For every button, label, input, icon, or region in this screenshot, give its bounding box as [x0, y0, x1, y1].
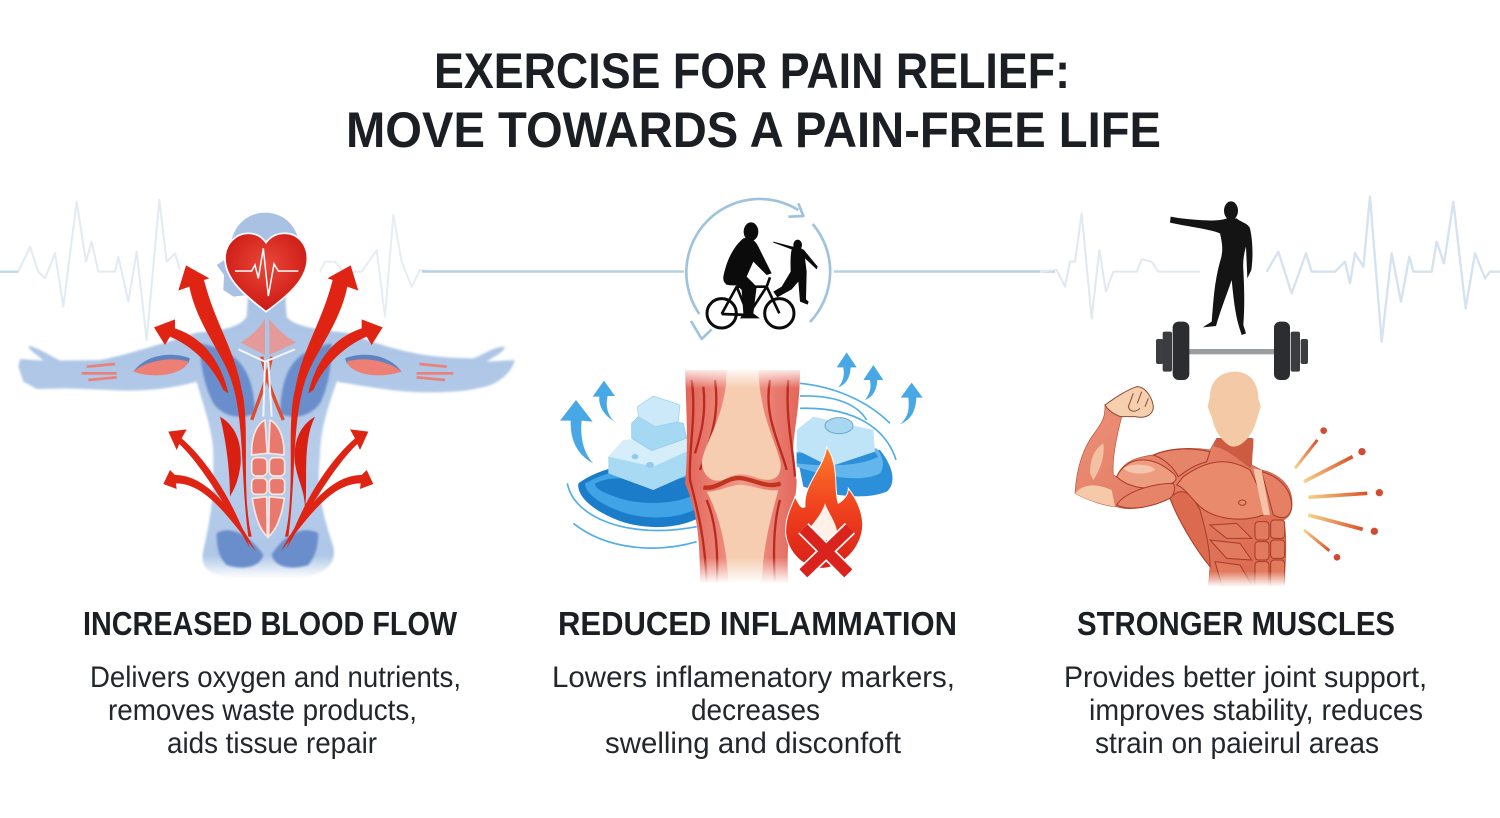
abdominal blocks: [1210, 520, 1285, 587]
body silhouette: [18, 290, 515, 578]
title: MOVE TOWARDS A PAIN-FREE LIFE: [346, 102, 1161, 158]
heartbeat line: left: [0, 200, 433, 340]
neck muscles: [241, 318, 296, 355]
description: inflammation: Lowers inflamenatory markers,: [552, 661, 955, 694]
panel: stronger muscles illustration: [1075, 201, 1383, 587]
heading: inflammation: REDUCED INFLAMMATION: [558, 605, 957, 642]
barbell: [1156, 322, 1308, 380]
standing silhouette: [1170, 201, 1252, 335]
ice pack: left: [578, 396, 698, 527]
runner: [773, 240, 818, 305]
red arrows: right: [281, 265, 383, 552]
cycle arrows: [686, 199, 830, 339]
forearm arrows: [82, 364, 453, 380]
section: reduced inflammation: [552, 605, 957, 760]
panel: exercise icon in circle: [560, 199, 923, 583]
section: stronger muscles: [1064, 605, 1427, 760]
flame with cross: [786, 447, 863, 573]
rising blue arrows: [560, 352, 923, 463]
head: [217, 213, 300, 297]
description: muscles: improves stability, reduces: [1089, 694, 1423, 727]
title: [346, 43, 1161, 158]
section: increased blood flow: [83, 605, 461, 760]
description: inflammation: decreases: [691, 694, 820, 727]
description: blood flow: removes waste products,: [108, 694, 417, 727]
arm muscles: [1117, 460, 1176, 488]
heartbeat line: center: [422, 270, 1055, 273]
description: blood flow: Delivers oxygen and nutrients,: [90, 661, 461, 694]
description: blood flow: aids tissue repair: [167, 727, 377, 760]
heading: blood flow: INCREASED BLOOD FLOW: [83, 605, 458, 642]
description: muscles: strain on paieirul areas: [1095, 727, 1379, 760]
description: blood flow: [90, 661, 461, 760]
description: muscles: Provides better joint support,: [1064, 661, 1427, 694]
abdominal muscles: [252, 420, 285, 537]
ray tips: [1320, 427, 1383, 561]
arm muscles: [133, 355, 402, 375]
cyclist: [707, 222, 794, 328]
motion swooshes: [567, 383, 896, 548]
central vessels: [252, 357, 283, 420]
knee joint: [685, 370, 800, 583]
heading: muscles: STRONGER MUSCLES: [1077, 605, 1395, 642]
side vessels: [220, 417, 315, 510]
ice pack: right: [797, 417, 892, 496]
description: inflammation: [552, 661, 955, 760]
fist: [1105, 387, 1153, 417]
description: muscles: [1064, 661, 1427, 760]
chest and hip shading: [200, 343, 332, 568]
lat: [1170, 492, 1210, 567]
muscle highlights: [1123, 465, 1155, 474]
heartbeat line: right: [1040, 197, 1500, 342]
heart: [225, 233, 307, 312]
head: [1208, 372, 1261, 447]
pectorals: [1177, 462, 1264, 519]
forearm skin: [1075, 485, 1115, 507]
description: inflammation: swelling and disconfoft: [605, 727, 902, 760]
panel: blood flow illustration: [18, 213, 515, 578]
strength rays: [1295, 440, 1367, 551]
title: EXERCISE FOR PAIN RELIEF:: [434, 43, 1070, 99]
muscular torso: [1075, 405, 1292, 587]
red arrows: left: [154, 265, 256, 552]
